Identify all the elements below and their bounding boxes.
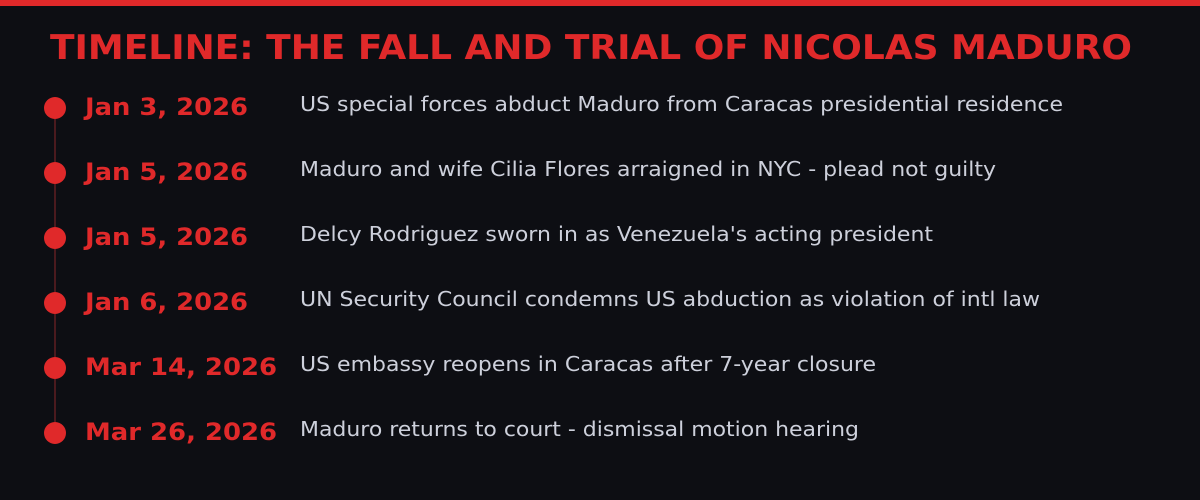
event 2 [44, 157, 996, 186]
top accent bar [0, 0, 1200, 6]
timeline connector line [54, 119, 56, 422]
event 5: Mar 14, 2026 [85, 353, 277, 381]
event 4 [44, 287, 1040, 316]
event 3: Jan 5, 2026 [83, 223, 248, 251]
event 3 [44, 222, 933, 251]
event 3: Delcy Rodriguez sworn in as Venezuela's acting president [300, 222, 933, 246]
event 2: Maduro and wife Cilia Flores arraigned in NYC - plead not guilty [300, 157, 996, 181]
event 4: Jan 6, 2026 [83, 288, 248, 316]
event 2: Jan 5, 2026 [83, 158, 248, 186]
title: TIMELINE: THE FALL AND TRIAL OF NICOLAS MADURO [50, 28, 1132, 68]
event 5: US embassy reopens in Caracas after 7-year closure [300, 352, 876, 376]
event 1: US special forces abduct Maduro from Caracas presidential residence [300, 92, 1063, 116]
event 5 [44, 352, 876, 381]
event 6: Maduro returns to court - dismissal motion hearing [300, 417, 859, 441]
event 6 [44, 417, 859, 446]
event 1 [44, 92, 1063, 121]
event 6: Mar 26, 2026 [85, 418, 277, 446]
event 1: Jan 3, 2026 [83, 93, 248, 121]
event 4: UN Security Council condemns US abduction as violation of intl law [300, 287, 1040, 311]
